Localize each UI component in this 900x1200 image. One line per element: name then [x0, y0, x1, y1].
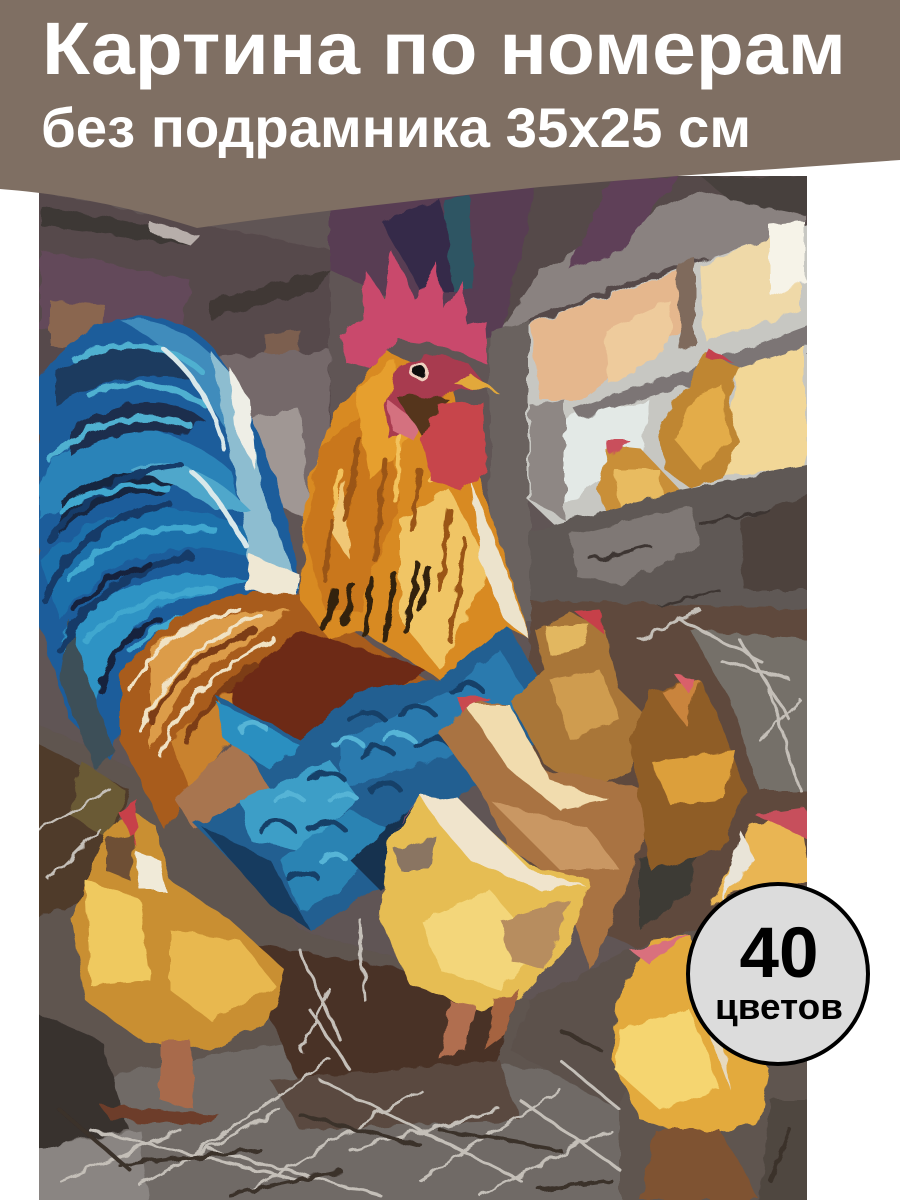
- floor: [30, 600, 820, 1200]
- badge number: 40: [740, 914, 818, 993]
- wing feather strokes: [130, 610, 275, 755]
- dark straw shadows: [60, 1030, 790, 1195]
- ledge plank marks: [590, 510, 770, 610]
- rooster neck: golden hackle: [300, 350, 530, 680]
- tail feather strokes: [45, 346, 245, 690]
- title: Картина по номерам: [42, 7, 846, 90]
- subtitle: без подрамника 35х25 см: [41, 96, 751, 159]
- badge: 40 colours: [688, 884, 868, 1064]
- top banner: [0, 0, 900, 228]
- rooster tail: [38, 317, 300, 770]
- hens on the window sill: [597, 348, 740, 522]
- chick: golden right: [630, 675, 745, 870]
- chick: yellow bottom right: [612, 935, 770, 1200]
- chick: far right edge: [710, 808, 810, 905]
- rooster breast: blue plumage: [195, 620, 540, 930]
- badge label: цветов: [715, 986, 843, 1027]
- painting: rooster and chicks in a barn: [30, 170, 820, 1200]
- chick: centre-right brown: [438, 696, 645, 970]
- neck feather streaks: [325, 430, 465, 640]
- rooster head: [385, 352, 498, 442]
- straw on the floor: [40, 610, 800, 1195]
- rooster wing: [120, 593, 440, 830]
- rooster comb: [340, 252, 488, 368]
- ledge shadow: [740, 495, 810, 590]
- breast feather scales: [240, 682, 508, 880]
- ledge highlight: [570, 505, 700, 585]
- chick: brown behind rooster: [511, 610, 642, 782]
- barn window: [528, 222, 810, 530]
- ledge below the window: [554, 465, 807, 532]
- rooster wattle: [422, 402, 486, 490]
- barn background: [39, 176, 807, 1000]
- chick: yellow centre: [380, 795, 590, 1060]
- chick: yellow left: [72, 800, 285, 1125]
